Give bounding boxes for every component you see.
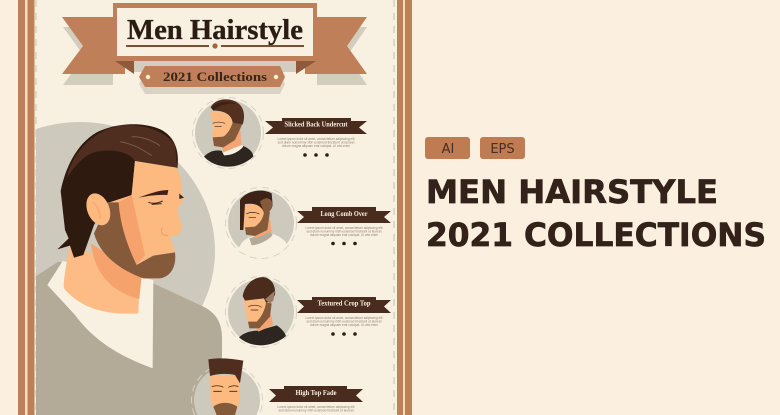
plaque dots — [146, 75, 278, 79]
format badge: AI — [425, 137, 470, 159]
portrait 4 — [192, 358, 263, 415]
ear — [86, 193, 110, 226]
title underline — [126, 43, 304, 49]
sweater — [30, 262, 222, 415]
ribbon folds — [115, 61, 316, 74]
poster right border — [397, 0, 412, 415]
main heading: 2021 COLLECTIONS — [426, 216, 766, 254]
closed eye — [148, 201, 163, 204]
back hair — [57, 124, 178, 258]
t-shirt collar — [47, 261, 153, 368]
description 1: Lorem ipsum dolor sit amet, consectetuer adipiscing elit — [278, 137, 355, 141]
ribbon 2 — [297, 207, 391, 223]
face shadow — [119, 195, 145, 265]
format badge: EPS — [480, 137, 525, 159]
dots 2 — [331, 242, 357, 245]
title text: Men Hairstyle — [127, 15, 303, 46]
title box — [113, 3, 317, 61]
banner shadow — [63, 27, 367, 85]
hair top highlight — [67, 125, 177, 178]
portrait 2 — [226, 188, 296, 258]
description 2 — [306, 226, 383, 237]
grey circle backdrop — [36, 122, 215, 306]
description 3 — [306, 316, 383, 327]
style card: Long Comb Over — [226, 188, 391, 258]
main heading: MEN HAIRSTYLE — [426, 173, 718, 211]
dots 3 — [331, 332, 357, 336]
ribbon 1 — [265, 118, 367, 134]
large portrait — [36, 122, 222, 415]
poster left border — [18, 0, 34, 415]
dots 1 — [303, 153, 329, 157]
ribbon tails — [62, 17, 367, 74]
style card: Textured Crop Top — [226, 276, 391, 348]
subtitle text: 2021 Collections — [163, 69, 267, 84]
portrait 1 — [192, 98, 264, 168]
style card: Slicked Back Undercut — [192, 98, 367, 168]
subtitle plaque shadow — [139, 73, 285, 94]
ribbon label: Slicked Back Undercut — [284, 120, 348, 128]
description 2: Lorem ipsum dolor sit amet, consectetuer adipiscing elit — [306, 226, 383, 230]
description 1: dolore magna aliquam erat volutpat. Ut wisi enim — [282, 144, 350, 148]
neck — [64, 245, 140, 314]
description 4: Lorem ipsum dolor sit amet, consectetuer adipiscing elit — [278, 405, 355, 409]
description 4: sed diam nonummy nibh euismod tincidunt ut laoreet — [278, 408, 354, 412]
description 4 — [278, 405, 355, 412]
description 2: dolore magna aliquam erat volutpat. Ut wisi enim — [310, 233, 378, 237]
format badge: AI: AI — [442, 142, 454, 157]
description 3: Lorem ipsum dolor sit amet, consectetuer adipiscing elit — [306, 316, 383, 320]
title banner — [62, 3, 367, 94]
portrait 3 — [226, 276, 296, 348]
face — [109, 161, 184, 265]
style card: High Top Fade — [192, 358, 363, 415]
ribbon label: Long Comb Over — [320, 210, 368, 218]
description 2: sed diam nonummy nibh euismod tincidunt ut laoreet — [306, 230, 382, 234]
beard — [94, 202, 175, 278]
ribbon 3 — [297, 297, 391, 313]
eyebrow — [138, 190, 184, 199]
hair strands — [120, 137, 160, 156]
poster — [0, 0, 412, 415]
description 3: dolore magna aliquam erat volutpat. Ut wisi enim — [310, 323, 378, 327]
ribbon label: High Top Fade — [296, 389, 336, 397]
ribbon 4 — [269, 386, 363, 402]
main heading — [426, 173, 766, 254]
description 3: sed diam nonummy nibh euismod tincidunt ut laoreet — [306, 320, 382, 324]
description 1 — [278, 137, 355, 148]
format badge: EPS: EPS — [490, 142, 515, 157]
ribbon label: Textured Crop Top — [318, 300, 371, 308]
neck shadow — [91, 243, 142, 299]
nose line — [161, 228, 168, 236]
description 1: sed diam nonummy nibh euismod tincidunt ut laoreet — [278, 140, 355, 144]
subtitle plaque — [139, 66, 285, 87]
